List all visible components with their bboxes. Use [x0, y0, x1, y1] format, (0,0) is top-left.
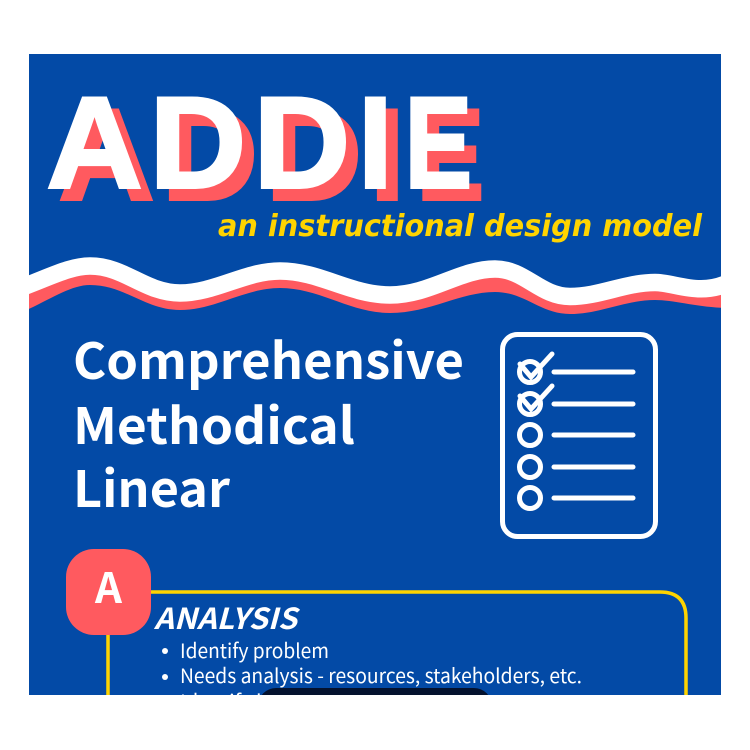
- background panel: [29, 54, 721, 695]
- title: ADDIE: A: [46, 70, 142, 216]
- title shadow: ADDIE: E: [417, 82, 484, 228]
- title: ADDIE: D: [150, 70, 246, 216]
- bullet list: Identify learners: [180, 686, 332, 715]
- section heading: ANALYSIS: ANALYSIS: [153, 596, 301, 638]
- title shadow: ADDIE: [58, 82, 484, 228]
- bullet list: Needs analysis - resources, stakeholders, etc.: [180, 660, 582, 689]
- title: ADDIE: D: [254, 70, 350, 216]
- title shadow: ADDIE: I: [370, 82, 405, 228]
- badge: A: [66, 549, 151, 635]
- heading: Comprehensive: Comprehensive: [73, 322, 464, 394]
- title: ADDIE: [46, 70, 472, 216]
- title: ADDIE: E: [405, 70, 472, 216]
- title: ADDIE: I: [358, 70, 393, 216]
- bottom white margin: [0, 695, 750, 750]
- icon: checklist: [502, 334, 656, 536]
- dark video overlay pill: [258, 688, 492, 728]
- badge: A: A: [94, 555, 123, 616]
- heading: Methodical: Methodical: [73, 387, 355, 459]
- bullet list: Identify problem: [180, 635, 329, 664]
- heading: Linear: Linear: [73, 450, 230, 522]
- wave: [20, 266, 730, 314]
- title shadow: ADDIE: D: [162, 82, 258, 228]
- bullet list: [162, 635, 582, 715]
- analysis card border: [108, 592, 686, 696]
- subtitle: an instructional design model: [218, 209, 703, 244]
- title shadow: ADDIE: A: [58, 82, 154, 228]
- title shadow: ADDIE: D: [266, 82, 362, 228]
